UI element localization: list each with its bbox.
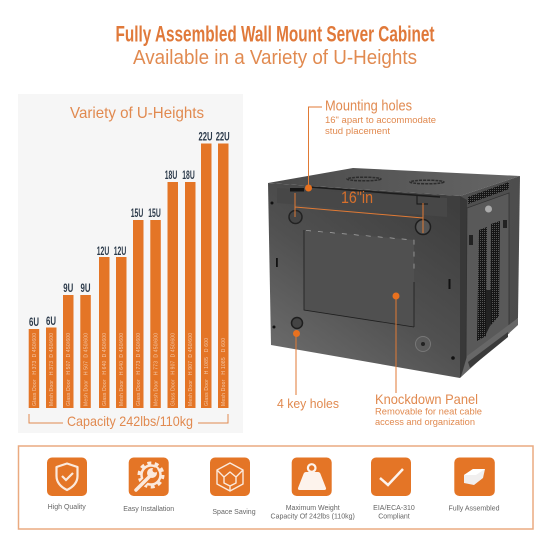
bar chart: 15U xyxy=(148,206,161,220)
callout: mounting holes: stud placement xyxy=(325,126,391,136)
16 inch dimension xyxy=(295,188,423,233)
callout: knockdown panel: Knockdown Panel xyxy=(375,391,478,407)
feature: fully assembled xyxy=(449,458,500,513)
feature: EIA/ECA-310 compliant xyxy=(371,458,415,521)
bar chart: Glass Door H 373 D 450/600 xyxy=(32,333,38,406)
callout: mounting holes xyxy=(305,98,436,192)
callout: mounting holes: 16" apart to accommodate xyxy=(325,115,436,125)
side mesh panel xyxy=(477,221,500,341)
cabinet top face xyxy=(268,168,520,196)
bar chart: Glass Door H 773 D 450/600 xyxy=(136,333,142,406)
bar chart: 15U xyxy=(131,206,143,220)
bar chart: Mesh Door H 773 D 450/600 xyxy=(153,333,159,406)
side latches and knob xyxy=(469,206,507,245)
16 inch dimension: 16"in xyxy=(341,188,373,207)
callout: mounting holes: Mounting holes xyxy=(325,98,412,115)
bar chart: Glass Door H 640 D 450/600 xyxy=(102,333,108,406)
side foot slit xyxy=(468,332,508,368)
feature: EIA/ECA-310 compliant: EIA/ECA-310 xyxy=(373,505,415,512)
back face screw holes and slots xyxy=(270,202,455,360)
bar chart: Mesh Door H 373 D 450/600 xyxy=(49,333,55,406)
cabinet side face xyxy=(460,176,520,378)
callout: 4 key holes: 4 key holes xyxy=(277,396,339,411)
bar chart: 12U xyxy=(114,244,126,258)
subtitle: Available in a Variety of U-Heights xyxy=(133,47,417,69)
corner post shading xyxy=(460,196,467,378)
side door xyxy=(466,193,509,362)
callout: knockdown panel xyxy=(375,292,482,427)
mounting bracket xyxy=(277,187,447,217)
panel heading: Variety of U-Heights xyxy=(70,105,204,122)
bar chart xyxy=(29,130,230,408)
capacity bracket and label: Capacity 242lbs/110kg xyxy=(67,413,193,429)
feature: space saving xyxy=(210,458,256,516)
feature: maximum weight xyxy=(271,458,355,521)
feature: easy installation: Easy Installation xyxy=(123,506,174,513)
bar chart: Glass Door H 507 D 450/600 xyxy=(66,333,72,406)
bar chart: 22U xyxy=(216,130,230,144)
feature: high quality: High Quality xyxy=(48,504,86,511)
bar chart: Glass Door H 1085 D 600 xyxy=(204,338,210,406)
bar chart: 12U xyxy=(97,244,109,258)
feature: space saving: Space Saving xyxy=(212,509,256,516)
knockdown panel xyxy=(303,230,414,327)
feature: EIA/ECA-310 compliant: Compliant xyxy=(378,514,410,521)
callout: 4 key holes xyxy=(277,330,339,411)
top vent fans xyxy=(347,177,444,184)
bar chart: Mesh Door H 507 D 450/600 xyxy=(83,333,89,406)
bar chart: 9U xyxy=(80,281,90,295)
bar chart: 18U xyxy=(182,168,195,182)
panel: variety of U-heights xyxy=(18,94,243,433)
bar chart: 6U xyxy=(29,315,39,329)
bar chart: Mesh Door H 907 D 450/600 xyxy=(188,333,194,406)
feature: maximum weight: Capacity Of 242lbs (110kg) xyxy=(271,514,355,521)
panel: features xyxy=(18,446,533,529)
callout: knockdown panel: access and organization xyxy=(375,417,475,427)
bar chart: 18U xyxy=(165,168,177,182)
bar chart: 9U xyxy=(63,281,73,295)
cabinet back face xyxy=(268,183,460,378)
feature: maximum weight: Maximum Weight xyxy=(286,505,340,512)
bar chart: Mesh Door H 640 D 450/600 xyxy=(119,333,125,406)
feature: high quality xyxy=(47,458,87,511)
feature: fully assembled: Fully Assembled xyxy=(449,506,500,513)
bar chart: Mesh Door H 1085 D 600 xyxy=(221,338,227,406)
bar chart: Glass Door H 907 D 450/600 xyxy=(170,333,176,406)
side vent louvres xyxy=(468,182,509,204)
callout: knockdown panel: Removable for neat cable xyxy=(375,407,482,417)
bar chart: 6U xyxy=(46,314,56,328)
feature: easy installation xyxy=(123,458,174,513)
bar chart: 22U xyxy=(198,130,212,144)
key holes xyxy=(289,210,430,352)
side foot xyxy=(461,318,518,377)
cabinet illustration xyxy=(268,168,520,378)
